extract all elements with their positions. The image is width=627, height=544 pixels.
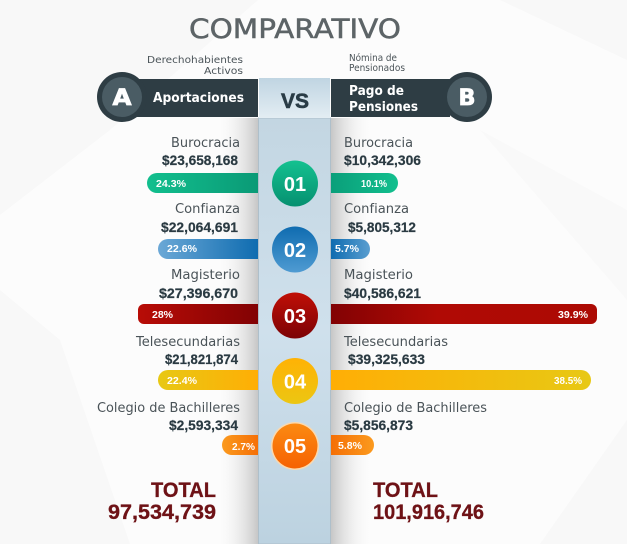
right label and value: Burocracia (344, 136, 413, 151)
right label and value (344, 202, 416, 235)
header: B pago de pensiones: B (458, 86, 476, 111)
central strip (258, 118, 330, 544)
number badge 01 (272, 160, 318, 206)
right label and value: Telesecundarias (343, 335, 448, 350)
row 01 burocracia (147, 136, 422, 206)
left label and value (159, 268, 240, 301)
row 04 telesecundarias (135, 335, 591, 404)
right label and value: Magisterio (344, 268, 413, 283)
left bar (138, 304, 258, 324)
header: VS: VS (281, 90, 309, 113)
right label and value: $10,342,306 (344, 153, 422, 168)
row 05 colegio de bachilleres (97, 401, 487, 470)
right bar: 38.5% (554, 375, 583, 387)
right bar: 39.9% (558, 309, 589, 321)
left bar (222, 435, 258, 455)
header: B pago de pensiones (331, 72, 492, 122)
right label and value: Confianza (344, 202, 409, 217)
caption: nomina de pensionados: Pensionados (349, 63, 405, 74)
left label and value (161, 202, 240, 235)
right label and value: Colegio de Bachilleres (344, 401, 487, 416)
total right (373, 479, 484, 524)
number badge 04: 04 (284, 372, 307, 394)
left label and value: Colegio de Bachilleres (97, 401, 240, 416)
right label and value: $39,325,633 (348, 352, 426, 367)
header: A aportaciones (97, 72, 258, 122)
right label and value: $5,856,873 (344, 418, 413, 433)
left label and value: $21,821,874 (165, 352, 238, 367)
right label and value (344, 136, 422, 168)
caption: nomina de pensionados: Nómina de (349, 53, 397, 64)
left bar (158, 239, 258, 259)
left bar: 22.4% (167, 375, 198, 387)
right bar (331, 173, 398, 193)
right label and value (344, 268, 422, 301)
right bar (331, 239, 370, 259)
right label and value: $40,586,621 (344, 286, 422, 301)
caption: nomina de pensionados (349, 53, 405, 74)
right bar (331, 304, 597, 324)
left label and value: $22,064,691 (161, 220, 239, 235)
right bar: 10.1% (361, 178, 388, 190)
number badge 01: 01 (284, 174, 306, 196)
right label and value (343, 335, 448, 367)
left bar: 24.3% (156, 178, 187, 190)
header: B pago de pensiones: Pensiones (349, 99, 418, 115)
header: VS (259, 78, 330, 118)
caption: derechohabientes activos: Activos (204, 66, 243, 77)
header: A aportaciones: A (112, 86, 132, 111)
row 02 confianza (158, 202, 416, 272)
right bar (331, 370, 591, 390)
number badge 02 (272, 226, 318, 272)
header: A aportaciones: Aportaciones (153, 90, 244, 106)
left bar (158, 370, 258, 390)
left label and value: $2,593,334 (169, 418, 238, 433)
number badge 04 (272, 358, 318, 404)
left bar: 28% (152, 309, 174, 321)
header: B pago de pensiones: Pago de (349, 83, 404, 99)
right bar: 5.7% (335, 243, 360, 255)
right bar (331, 435, 374, 455)
caption: derechohabientes activos (147, 55, 243, 77)
left label and value: Magisterio (171, 268, 240, 283)
number badge 03: 03 (284, 306, 306, 328)
left bar: 2.7% (232, 441, 256, 453)
left bar: 22.6% (167, 243, 198, 255)
side shadow left (215, 118, 259, 544)
title: COMPARATIVO (189, 14, 401, 45)
total left (108, 479, 216, 524)
left label and value: Burocracia (171, 136, 240, 151)
caption: derechohabientes activos: Derechohabientes (147, 55, 243, 66)
left label and value (135, 335, 240, 367)
total left: 97,534,739 (108, 501, 216, 524)
row 03 magisterio (138, 268, 597, 338)
left label and value: Confianza (175, 202, 240, 217)
number badge 02: 02 (284, 240, 306, 262)
left label and value (162, 136, 240, 168)
right label and value (344, 401, 487, 433)
number badge 05: 05 (284, 436, 306, 458)
right bar: 5.8% (338, 440, 363, 452)
left label and value: Telesecundarias (135, 335, 240, 350)
left label and value (97, 401, 240, 433)
total left: TOTAL (151, 479, 216, 502)
left label and value: $23,658,168 (162, 153, 238, 168)
number badge 03 (272, 292, 318, 338)
total right: TOTAL (373, 479, 438, 502)
number badge 05 (271, 422, 319, 470)
left bar (147, 173, 258, 193)
left label and value: $27,396,670 (159, 286, 238, 301)
side shadow right (330, 118, 374, 544)
total right: 101,916,746 (373, 501, 484, 524)
right label and value: $5,805,312 (348, 220, 416, 235)
